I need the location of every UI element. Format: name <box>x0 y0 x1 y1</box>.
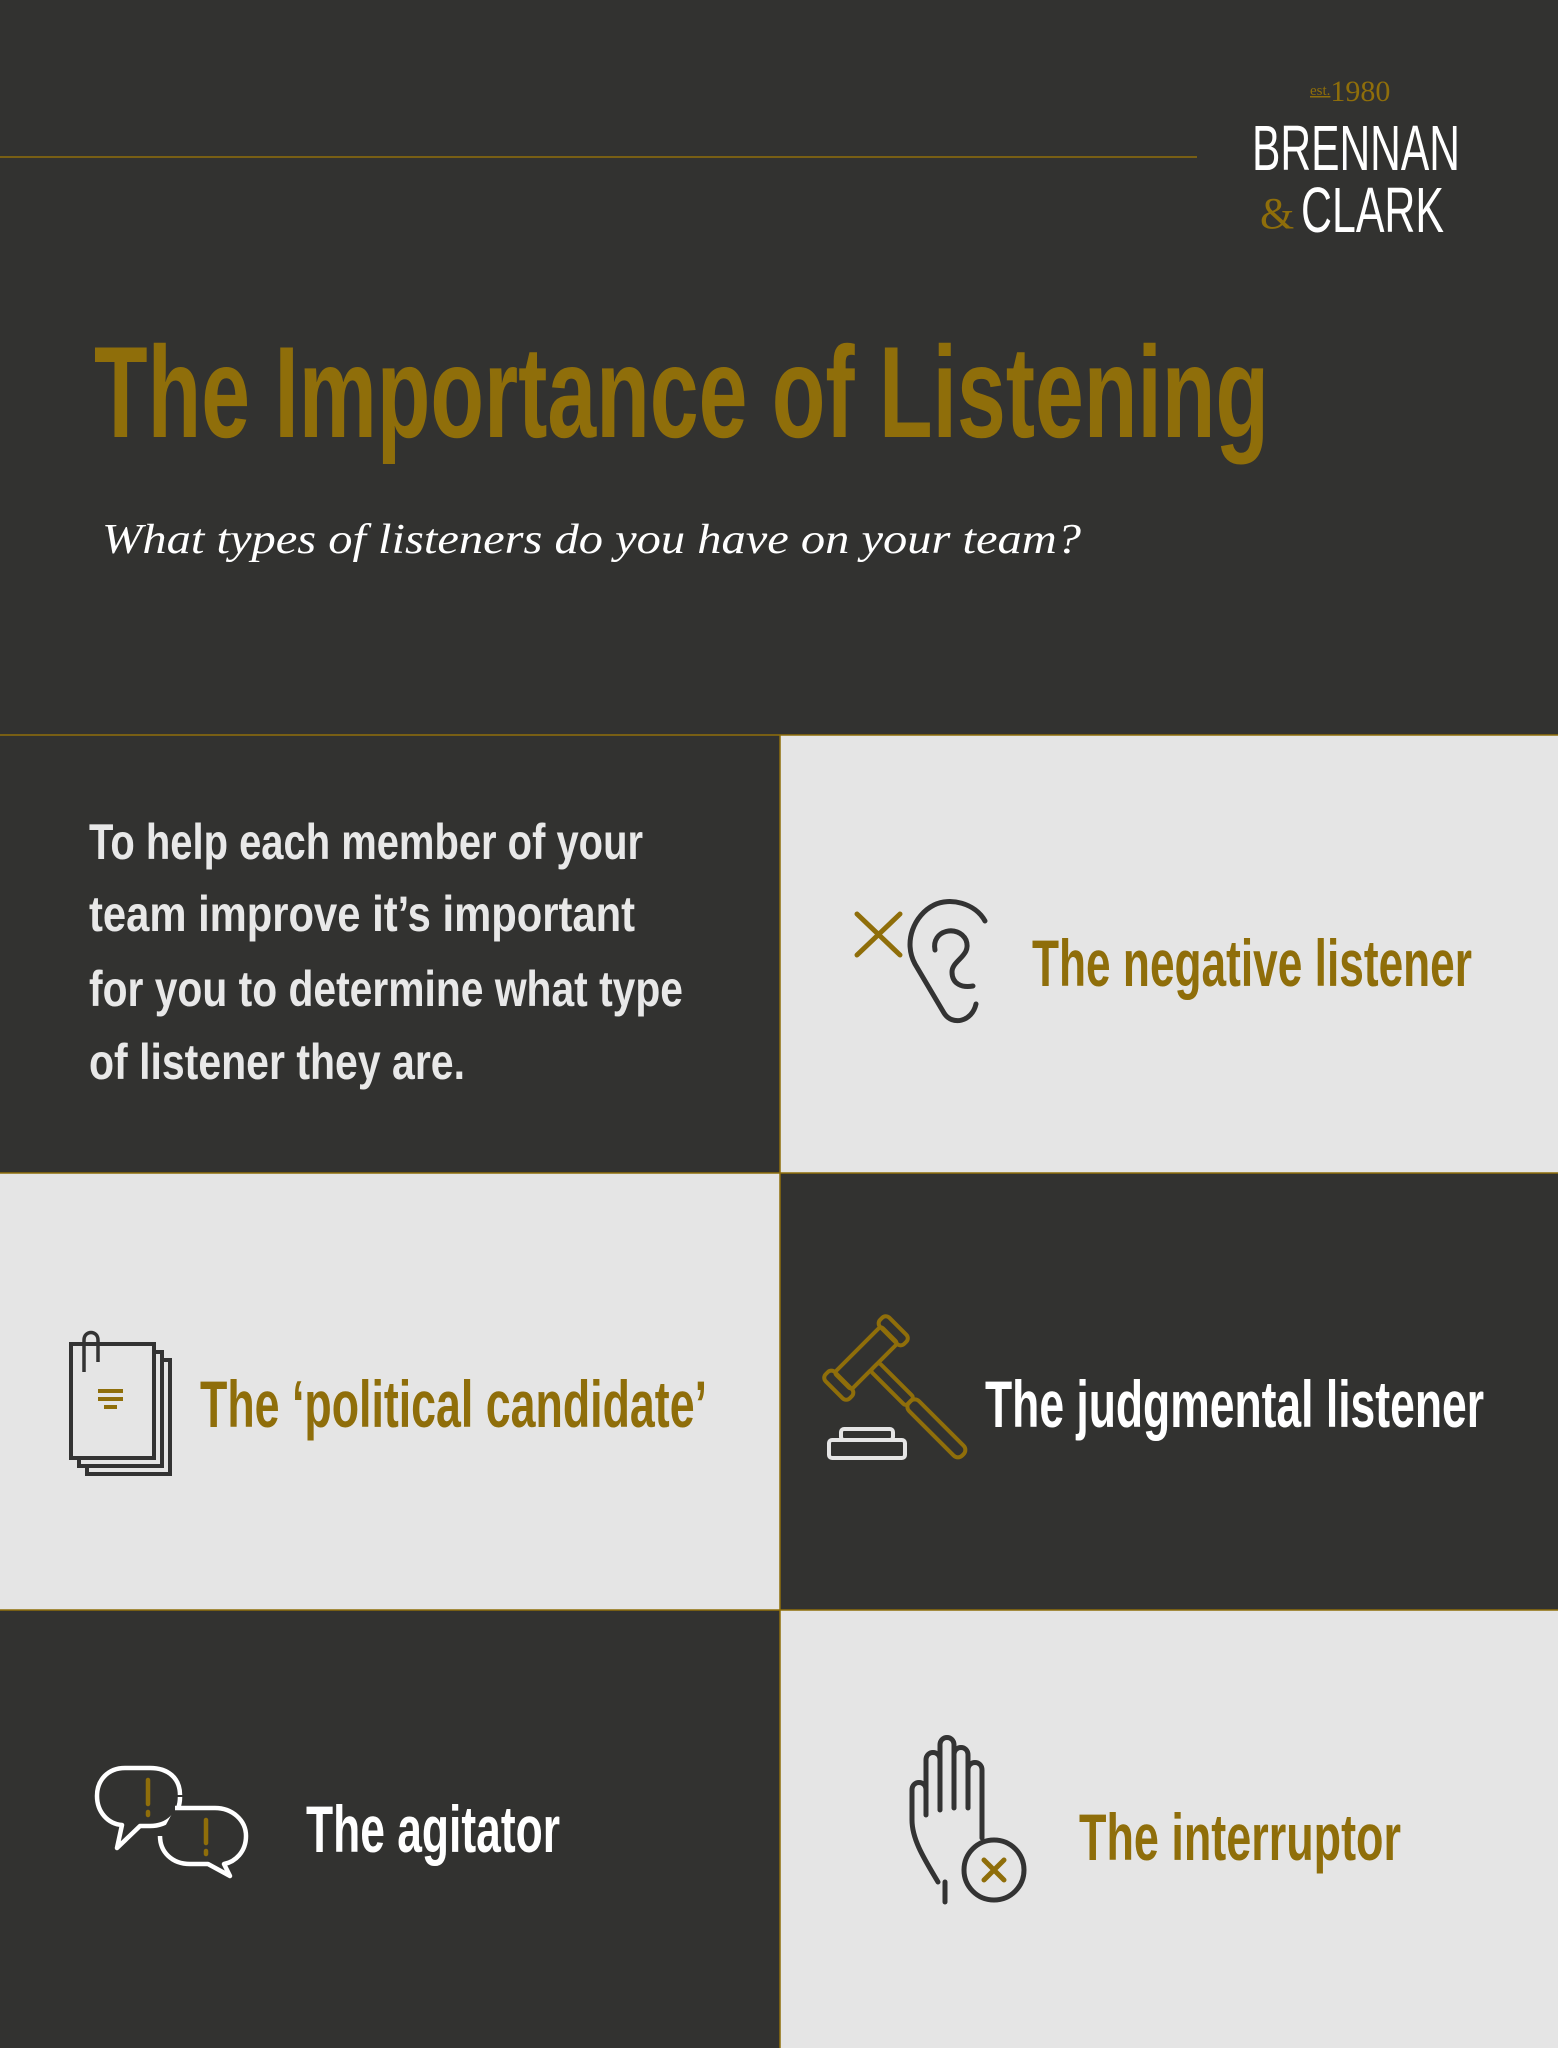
intro text: To help each member of your <box>89 814 643 870</box>
intro text: of listener they are. <box>89 1034 465 1090</box>
subtitle: What types of listeners do you have on your team? <box>102 517 1081 563</box>
logo: 1980 <box>1330 75 1390 108</box>
icon: papers <box>71 1332 170 1474</box>
intro text: for you to determine what type <box>89 961 683 1017</box>
logo: BRENNAN <box>1252 112 1460 184</box>
logo <box>1252 75 1460 246</box>
heading: political candidate: The ‘political candidate’ <box>200 1367 707 1441</box>
icon: ear with x <box>857 902 985 1021</box>
logo: est. <box>1310 83 1330 99</box>
icon: hand with x <box>912 1738 1024 1902</box>
icon: gavel <box>822 1314 995 1487</box>
heading: interruptor: The interruptor <box>1079 1800 1401 1874</box>
intro text: team improve it’s important <box>89 886 635 942</box>
logo: & <box>1260 189 1294 238</box>
icon: speech bubbles <box>97 1768 246 1876</box>
intro text <box>89 814 683 1090</box>
logo: CLARK <box>1301 174 1444 246</box>
grid cells <box>0 735 1558 2048</box>
heading: agitator: The agitator <box>306 1792 560 1866</box>
